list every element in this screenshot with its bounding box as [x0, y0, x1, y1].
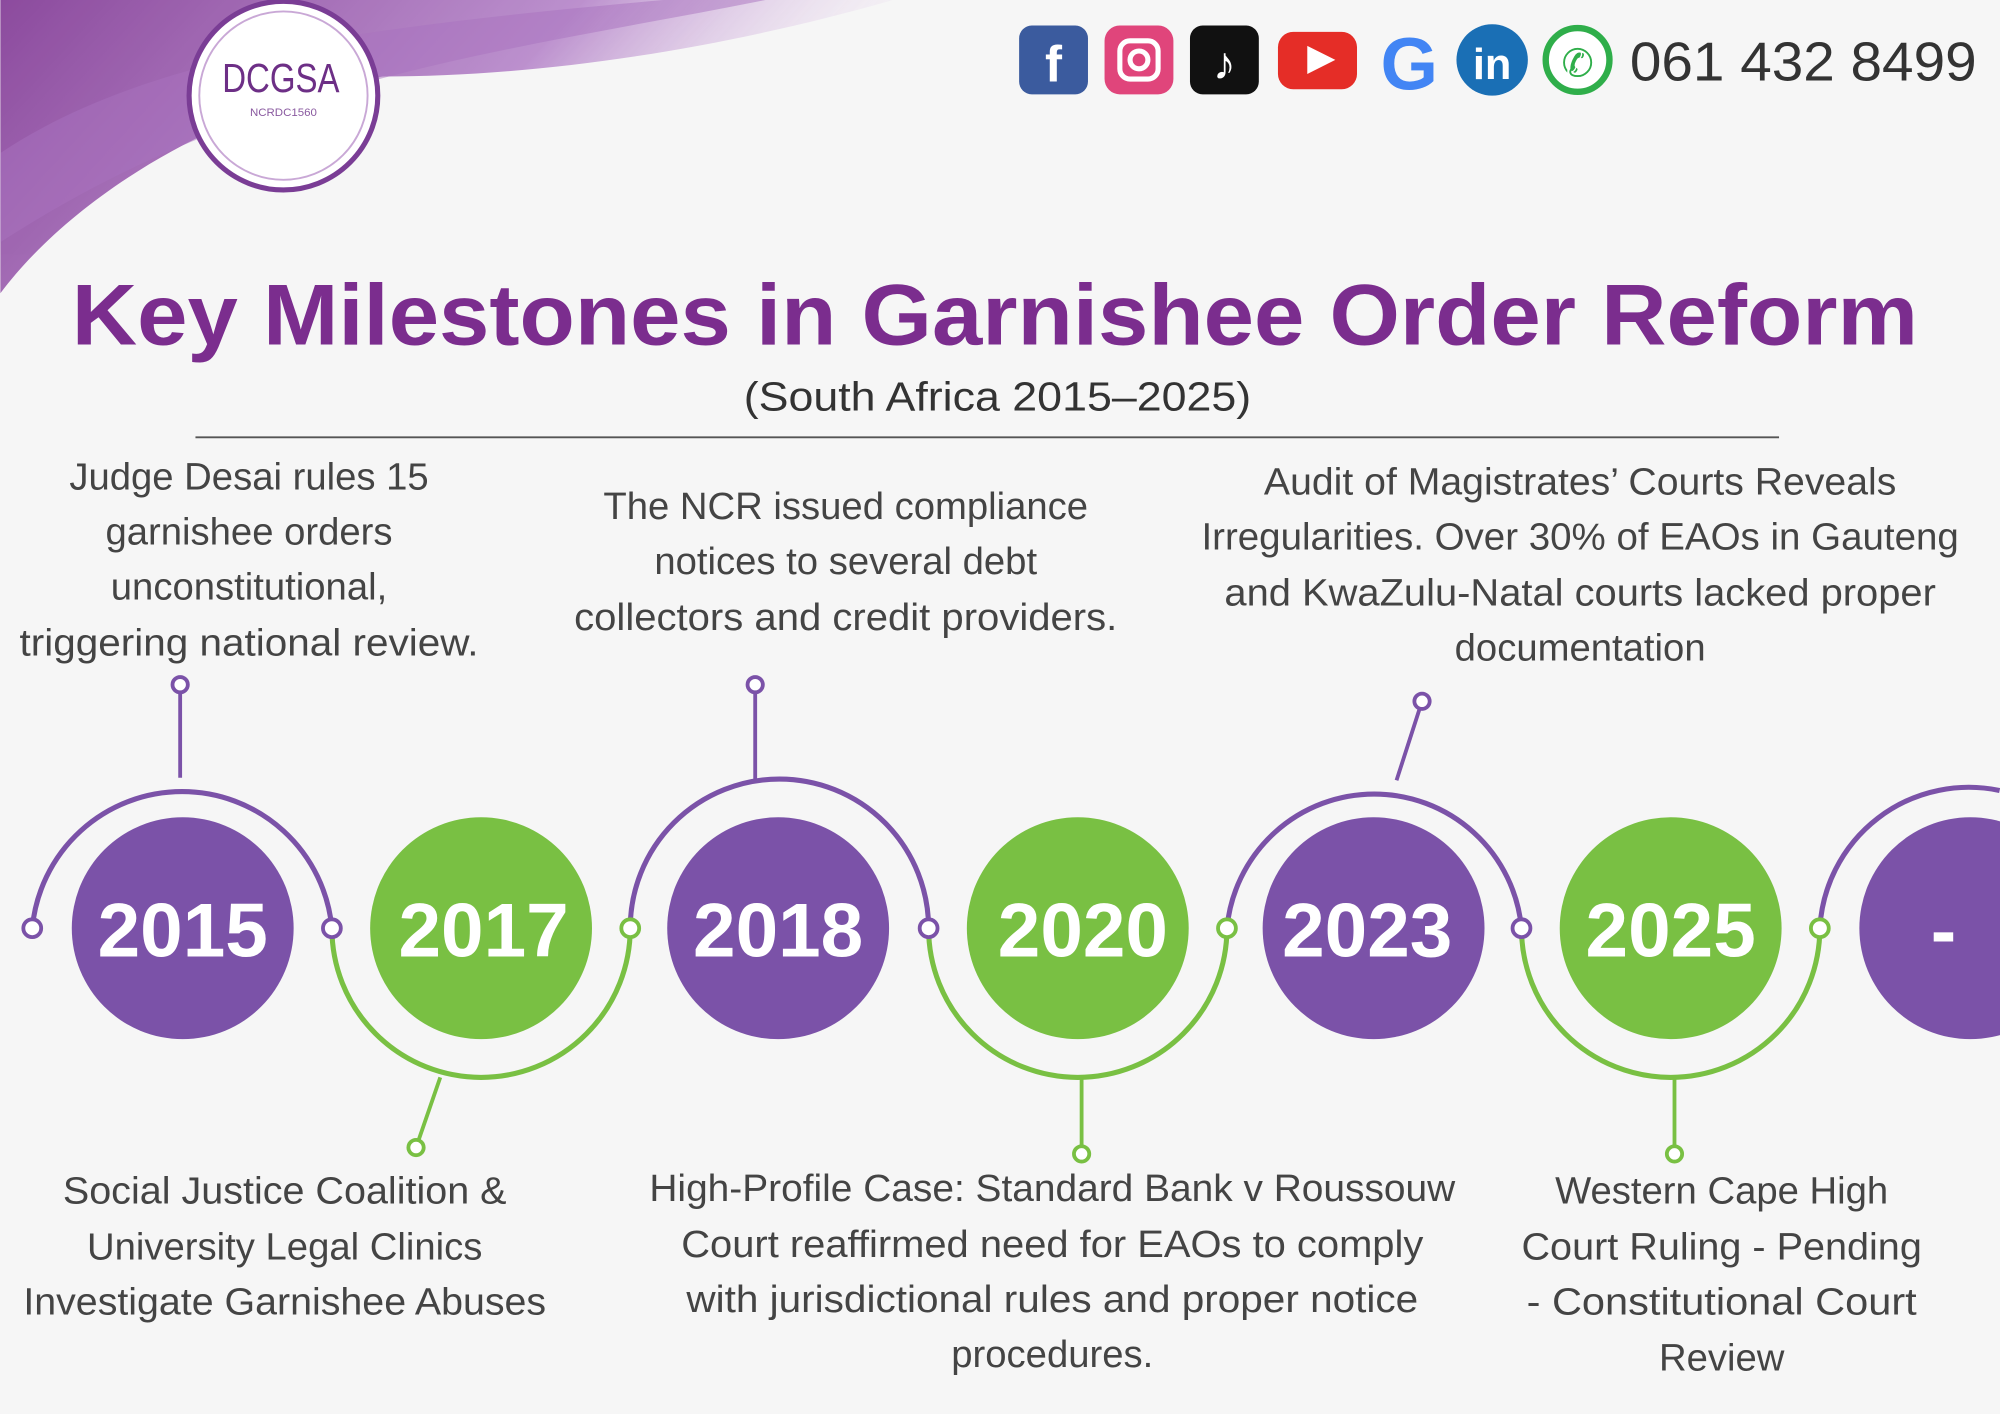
timeline [32, 685, 2000, 1154]
year circles: 2020 [998, 888, 1168, 973]
text: 2025: - Constitutional Court [1527, 1281, 1917, 1324]
subtitle: (South Africa 2015–2025) [744, 374, 1251, 420]
year circles: 2018 [693, 888, 863, 973]
text: 2017: University Legal Clinics [87, 1226, 482, 1269]
text: 2020: Court reaffirmed need for EAOs to comply [681, 1223, 1424, 1266]
text: 2015: garnishee orders [105, 510, 393, 553]
year circles: 2015 [98, 888, 268, 973]
text: 2023: Irregularities. Over 30% of EAOs in Gauteng [1201, 516, 1959, 559]
text: 2020: with jurisdictional rules and proper notice [685, 1278, 1418, 1321]
year circles: 2025 [1586, 888, 1756, 973]
text: 2015: triggering national review. [20, 621, 479, 664]
decorative swoosh [0, 0, 893, 293]
text: 2017: Social Justice Coalition & [63, 1170, 507, 1213]
text: 2025: Western Cape High [1555, 1170, 1888, 1213]
logo: DCGSA [222, 55, 340, 101]
text: 2023: Audit of Magistrates’ Courts Reveals [1264, 461, 1896, 504]
text: 2025: Court Ruling - Pending [1521, 1226, 1922, 1269]
text: 2020 [649, 1167, 1456, 1376]
text: 2025: Review [1659, 1337, 1785, 1380]
year circles: 2023 [1282, 888, 1452, 973]
text: 2018: collectors and credit providers. [574, 596, 1117, 639]
text: 2025 [1521, 1170, 1922, 1380]
text: 2015: Judge Desai rules 15 [69, 456, 429, 499]
social icons: ♪ [1213, 37, 1236, 89]
text: 2018 [574, 485, 1117, 639]
text: 2015 [20, 456, 479, 664]
logo: NCRDC1560 [250, 107, 317, 119]
year circles [72, 817, 2000, 1039]
text: 2018: The NCR issued compliance [603, 485, 1088, 528]
social icons: f [1045, 36, 1063, 93]
text: 2017: Investigate Garnishee Abuses [23, 1281, 546, 1324]
text: 2020: High-Profile Case: Standard Bank v Roussouw [649, 1167, 1456, 1210]
text: 2018: notices to several debt [654, 540, 1037, 583]
text: 2023: and KwaZulu-Natal courts lacked proper [1224, 572, 1936, 615]
social icons [1019, 22, 1609, 105]
logo [189, 1, 378, 190]
text: 2020: procedures. [951, 1333, 1153, 1376]
text: 2017 [23, 1170, 546, 1324]
social icons: in [1473, 41, 1511, 89]
text: 2023: documentation [1455, 626, 1706, 669]
year circles: 2017 [399, 888, 569, 973]
text: 2023 [1201, 461, 1959, 669]
social icons: G [1381, 22, 1438, 105]
text: 2015: unconstitutional, [111, 565, 387, 608]
social icons: ✆ [1562, 43, 1594, 86]
title: Key Milestones in Garnishee Order Reform [72, 267, 1918, 363]
phone number: 061 432 8499 [1630, 30, 1977, 92]
year circles: - [1931, 888, 1956, 973]
